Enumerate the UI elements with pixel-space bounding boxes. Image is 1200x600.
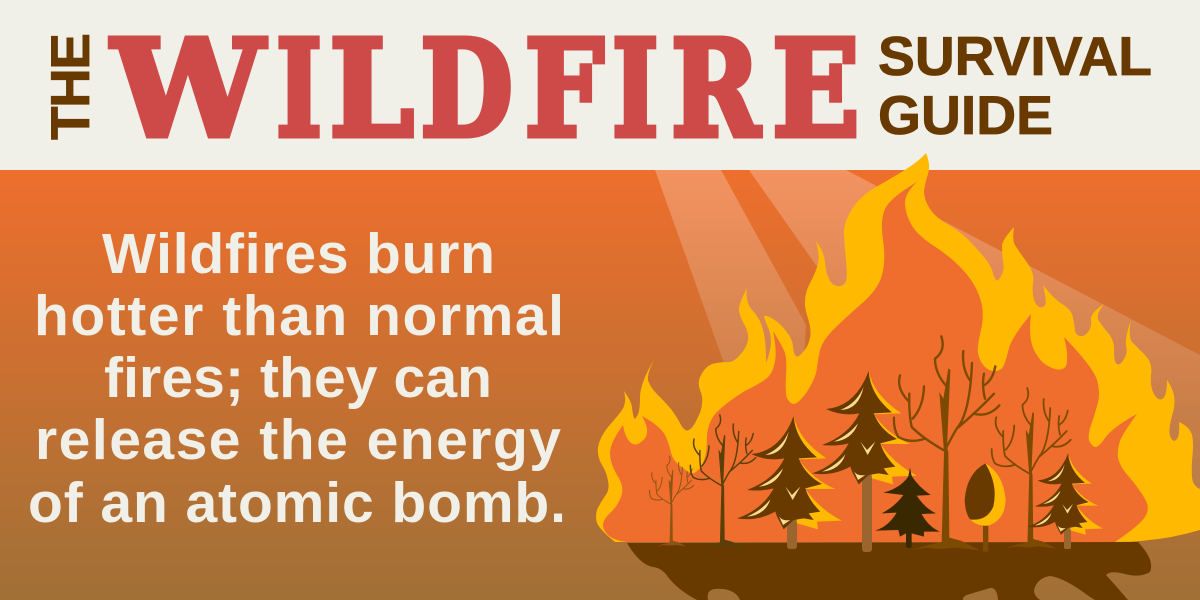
flames: orange interior <box>603 182 1148 542</box>
title: WILDFIRE: E <box>772 12 860 168</box>
body text: fires; they can <box>104 346 492 410</box>
tree: olive bare tree <box>690 415 756 548</box>
title: WILDFIRE: W <box>110 12 266 168</box>
title: SURVIVAL GUIDE: GUIDE <box>878 84 1053 146</box>
title: THE: THE <box>39 33 101 140</box>
body text <box>28 222 566 535</box>
flames: yellow outline <box>596 153 1200 542</box>
title: WILDFIRE: R <box>671 12 761 168</box>
title: WILDFIRE: I <box>612 12 659 168</box>
body text: of an atomic bomb. <box>28 471 566 535</box>
title: SURVIVAL GUIDE <box>878 25 1152 146</box>
ground shadow <box>627 542 1151 600</box>
title: WILDFIRE: D <box>420 12 513 168</box>
tree: dark pine <box>875 467 940 548</box>
header band <box>0 0 1200 170</box>
body text: release the energy <box>35 408 561 472</box>
orange gradient background <box>0 170 1200 600</box>
tree: small bare tree <box>650 456 694 546</box>
tree: right bare tree <box>992 388 1071 548</box>
tree: small pine right <box>1027 453 1103 549</box>
title: WILDFIRE <box>110 12 860 168</box>
body text: Wildfires burn <box>102 222 495 286</box>
tree: pine left <box>737 416 842 549</box>
title: WILDFIRE: I <box>276 12 322 168</box>
tree: tall pine <box>812 371 917 552</box>
tree: large bare tree <box>894 336 999 550</box>
light beams <box>655 170 1200 520</box>
title: WILDFIRE: L <box>329 12 414 168</box>
title: WILDFIRE: F <box>524 12 604 168</box>
tree: egg-shaped tree <box>965 463 1006 552</box>
body text: hotter than normal <box>34 284 564 348</box>
title: SURVIVAL GUIDE: SURVIVAL <box>878 25 1152 87</box>
